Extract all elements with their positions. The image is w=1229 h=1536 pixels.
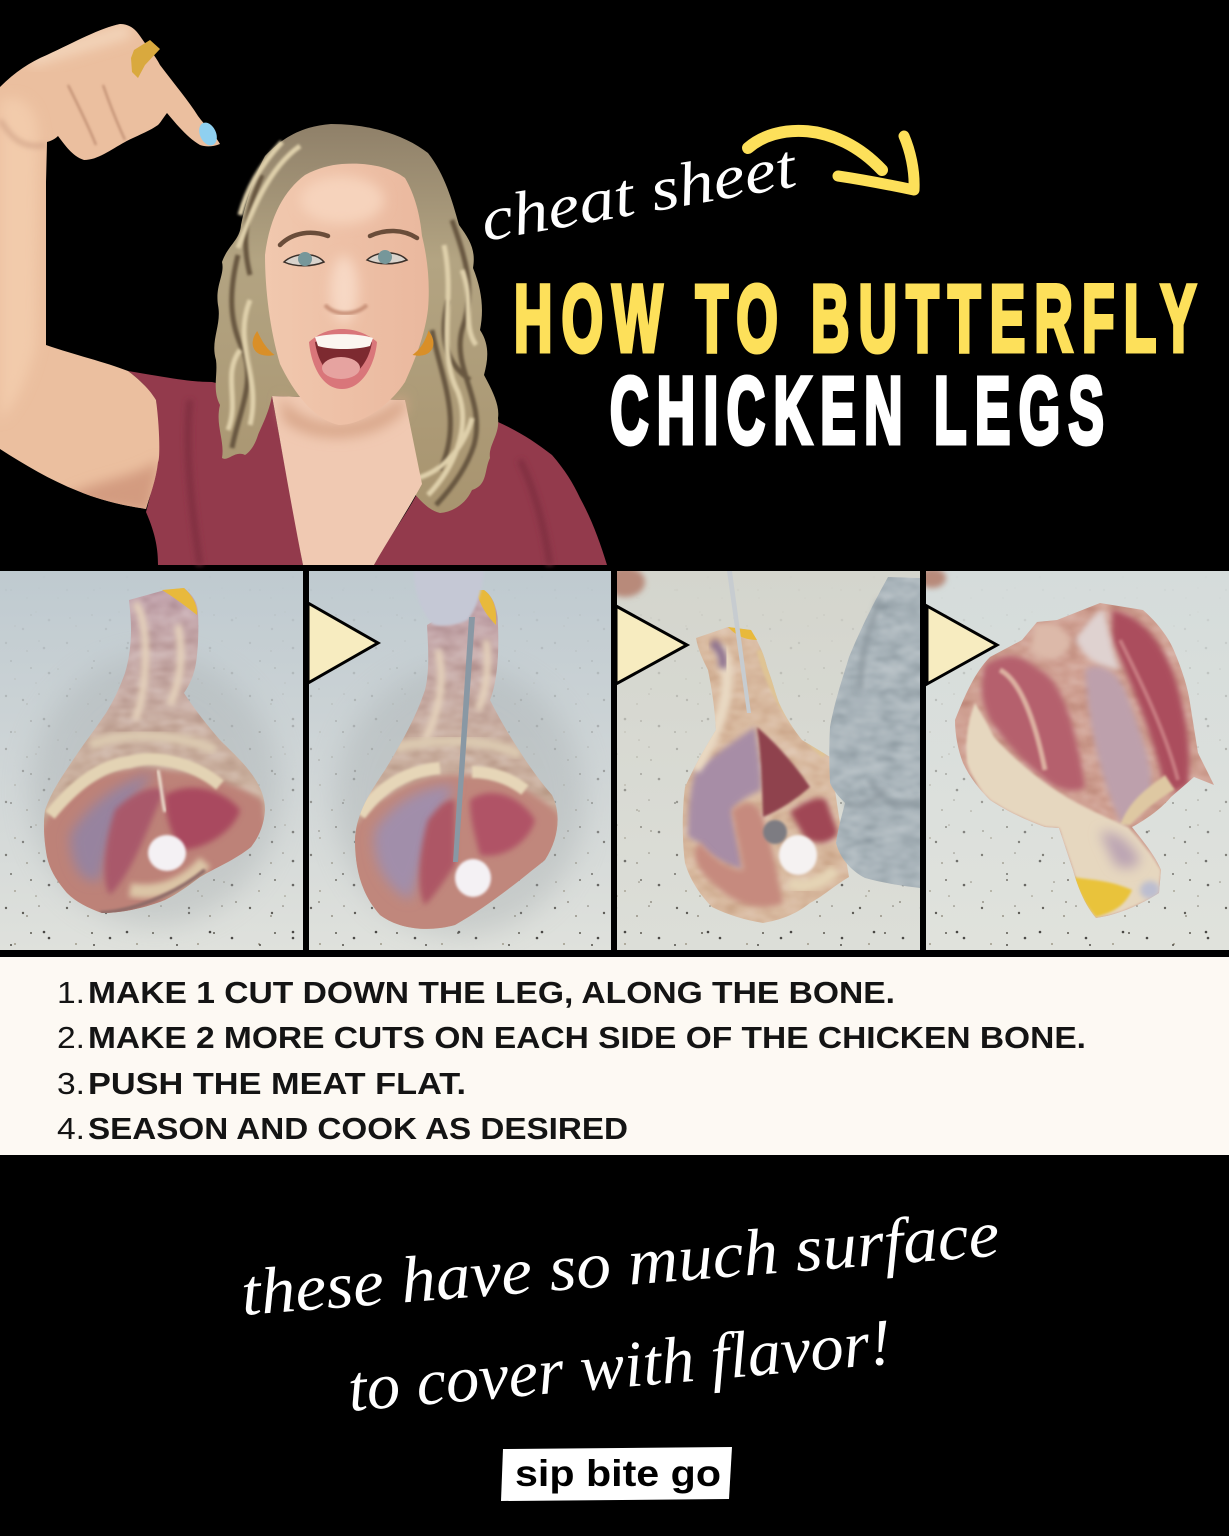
logo: sip bite go: sip bite go — [515, 1453, 721, 1494]
leg — [335, 585, 585, 935]
finger at corner — [926, 571, 950, 592]
step 1 text: 1. — [57, 975, 85, 1010]
hand-lettered label: cheat sheet: cheat sheet — [476, 132, 803, 255]
gloved hand — [829, 577, 920, 888]
step 3 text: 3. — [57, 1066, 85, 1101]
leg — [680, 625, 855, 925]
gold ring — [131, 40, 160, 78]
logo: sip bite go — [501, 1447, 732, 1501]
panel: instructions — [0, 957, 1229, 1155]
title line: chicken legs: CHICKEN LEGS — [610, 358, 1104, 464]
earrings — [254, 334, 271, 354]
closing script message — [238, 1198, 1002, 1426]
skin flap — [966, 703, 1161, 918]
gloved hand — [426, 589, 483, 627]
face — [265, 164, 429, 425]
step 2 text: MAKE 2 MORE CUTS ON EACH SIDE OF THE CHICKEN BONE. — [88, 1020, 1086, 1055]
eyes — [284, 254, 324, 266]
knife — [453, 617, 475, 862]
photo: woman pointing down — [0, 0, 607, 565]
script line 1: these have so much surface — [238, 1198, 1002, 1330]
photo panel: step 1 whole leg — [0, 571, 303, 950]
arrow: step 3 to 4 — [927, 606, 997, 684]
blue fingernail — [196, 120, 220, 148]
dress — [128, 371, 607, 565]
open mouth — [309, 329, 377, 389]
step 3 text: PUSH THE MEAT FLAT. — [88, 1066, 466, 1101]
step 2 text: 2. — [57, 1020, 85, 1055]
leg — [30, 585, 280, 925]
arrow: step 2 to 3 — [616, 606, 687, 684]
step 4 text: SEASON AND COOK AS DESIRED — [88, 1111, 628, 1146]
photo panel: step 4 butterflied meat — [918, 568, 1229, 950]
knife — [727, 571, 751, 713]
title line: how to butterfly: HOW TO BUTTERFLY — [514, 266, 1196, 372]
chest and neck — [272, 396, 422, 565]
photo panel: step 3 opening the cut — [605, 567, 920, 950]
finger at corner — [617, 571, 648, 600]
step 1 text: MAKE 1 CUT DOWN THE LEG, ALONG THE BONE. — [88, 975, 895, 1010]
photo panel: step 2 knife cut — [309, 571, 611, 950]
eyebrows — [280, 231, 417, 245]
arrow: yellow curved — [748, 131, 914, 190]
script line 2: to cover with flavor! — [345, 1306, 894, 1426]
nose — [325, 305, 367, 313]
step 4 text: 4. — [57, 1111, 85, 1146]
wavy hair — [214, 124, 498, 513]
arrow: step 1 to 2 — [308, 603, 378, 683]
butterflied meat — [950, 600, 1220, 920]
arm and hand — [0, 24, 220, 509]
title — [514, 266, 1196, 464]
